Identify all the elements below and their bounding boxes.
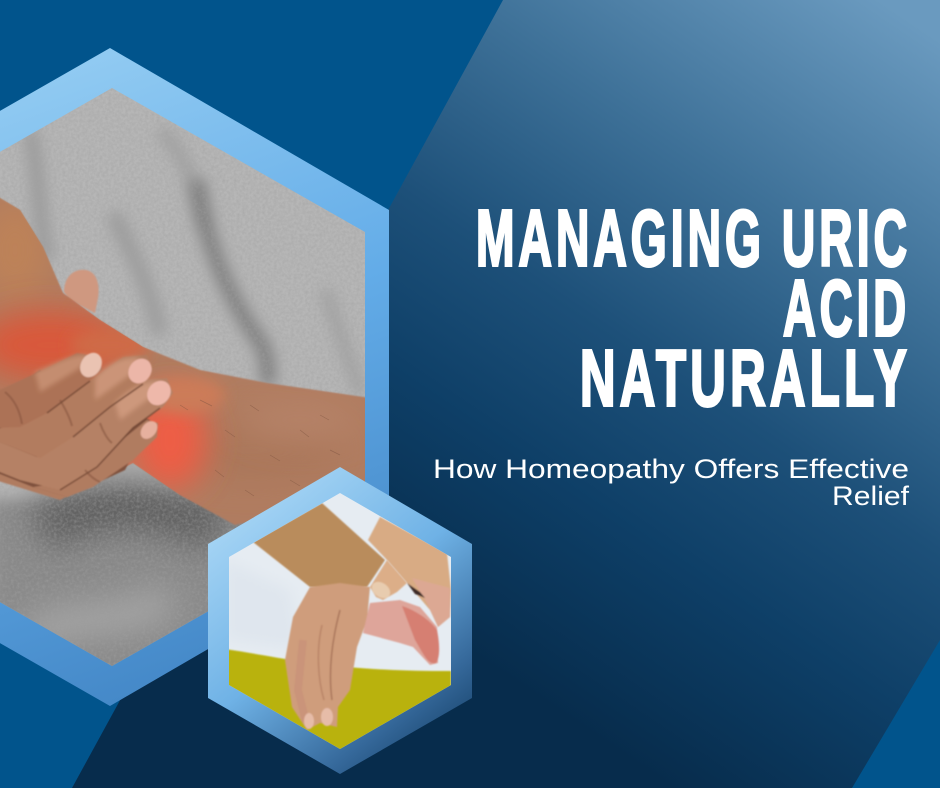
large hexagon photo: arm in pain xyxy=(0,80,380,680)
forearm xyxy=(0,195,370,525)
fingernails xyxy=(79,352,103,378)
subtitle xyxy=(433,454,910,511)
thumb xyxy=(370,560,407,600)
supporting hand xyxy=(368,517,451,627)
small hexagon photo: hand on wrist xyxy=(225,490,455,760)
pink fingers xyxy=(363,600,438,665)
small hexagon frame xyxy=(208,467,472,774)
title xyxy=(476,194,911,422)
subtitle: Relief xyxy=(832,481,910,511)
fingers xyxy=(33,420,158,497)
drooping hand xyxy=(285,560,439,730)
gaps between fingers xyxy=(47,381,160,490)
subtitle: How Homeopathy Offers Effective xyxy=(433,454,909,484)
gripping hand xyxy=(0,349,176,497)
large hexagon frame xyxy=(0,48,389,706)
forearm xyxy=(253,503,385,590)
knuckle creases xyxy=(5,392,112,482)
thumb behind the arm xyxy=(64,270,99,313)
